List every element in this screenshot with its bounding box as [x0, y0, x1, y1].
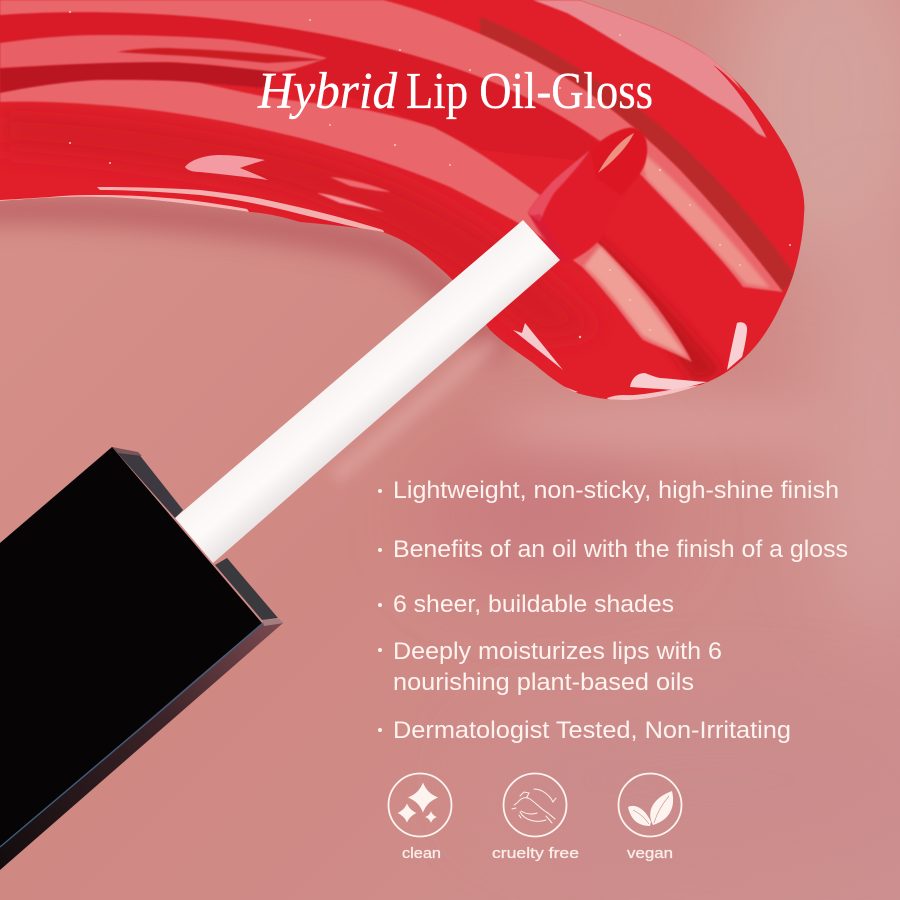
- band A: top pale ribbon: [0, 0, 783, 292]
- bullet 4: nourishing plant-based oils: [393, 669, 694, 696]
- bullet 2: Benefits of an oil with the finish of a gloss: [393, 536, 848, 563]
- dark red channels: [0, 12, 620, 165]
- front face: [0, 447, 262, 847]
- bullet 4: Deeply moisturizes lips with 6: [393, 638, 722, 665]
- inner collar lower: [215, 558, 278, 620]
- title: [257, 63, 653, 120]
- bullet 1: Lightweight, non-sticky, high-shine finish: [393, 477, 839, 504]
- icon: clean: clean: [402, 845, 441, 862]
- bullet 4: [378, 638, 722, 696]
- band D: outer rim highlight: [533, 0, 767, 138]
- icon: clean: [388, 774, 452, 862]
- bullet 5: Dermatologist Tested, Non-Irritating: [393, 717, 791, 744]
- icon: vegan leaves: vegan: [627, 845, 673, 862]
- glossy highlights: [185, 155, 268, 180]
- bullet 3: 6 sheer, buildable shades: [393, 591, 674, 618]
- band C: lower pale ribbon: [0, 80, 692, 362]
- applicator: white wand stem: [175, 220, 560, 563]
- red gloss swatch: [0, 0, 830, 420]
- title: Hybrid: [257, 63, 398, 120]
- black cap of lip gloss tube: [0, 447, 284, 870]
- inner collar upper: [112, 447, 183, 518]
- icon: vegan leaves: [618, 774, 682, 862]
- icon: cruelty free rabbit: [492, 774, 579, 862]
- benefits list: [378, 477, 848, 744]
- shimmer flecks: [69, 11, 791, 338]
- icon: cruelty free rabbit: cruelty free: [492, 845, 579, 862]
- blue edge reflection: [0, 623, 263, 847]
- title: Lip Oil-Gloss: [406, 63, 653, 120]
- band B: left pale ribbon: [0, 35, 327, 72]
- applicator: doe-foot brush tip: [528, 128, 647, 263]
- side bevel: [0, 623, 283, 870]
